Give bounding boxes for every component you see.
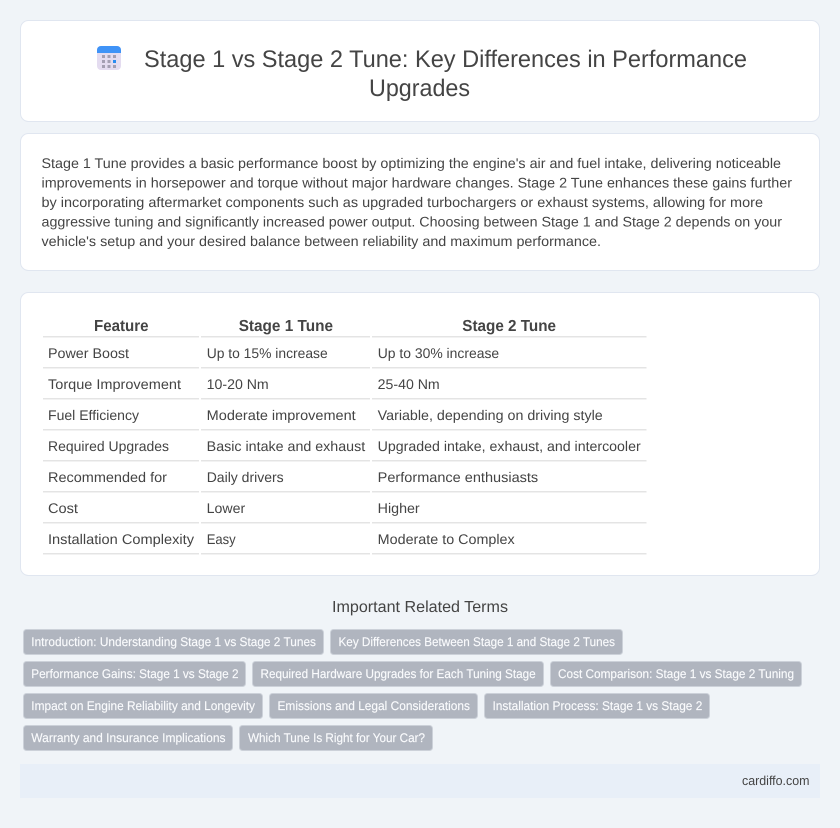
table header row: Stage 1 Tune: [239, 318, 333, 335]
title: Upgrades: [369, 75, 470, 102]
row: recommended for: Daily drivers: [207, 469, 284, 485]
title: [144, 46, 747, 102]
tag: introduction: [24, 630, 324, 654]
footer: cardiffo.com: [742, 773, 810, 788]
tag: required hardware: Required Hardware Upgrades for Each Tuning Stage: [260, 667, 536, 681]
panel: introduction text: aggressive tuning and significantly increased power output. Choosing between Stage 1 and Stage 2 depends on your: [42, 214, 782, 230]
row: cost: [43, 500, 646, 524]
row: fuel efficiency: [43, 407, 646, 430]
row: torque improvement: [43, 376, 646, 400]
panel: introduction text: improvements in horsepower and torque without major hardware changes. Stage 2 Tune enhances these gains further: [42, 174, 792, 190]
tag: key differences: [330, 630, 622, 654]
panel: related term tags: [24, 630, 802, 750]
row: cost: Lower: [207, 500, 246, 516]
panel: header: [20, 20, 820, 122]
tag: cost comparison: Cost Comparison: Stage 1 vs Stage 2 Tuning: [558, 667, 794, 681]
row: installation complexity: [43, 531, 646, 554]
row: recommended for: Performance enthusiasts: [378, 469, 538, 485]
row: recommended for: [43, 469, 646, 492]
row: power boost: Power Boost: [48, 345, 129, 361]
panel: introduction text: [20, 134, 820, 270]
tag: key differences: Key Differences Between Stage 1 and Stage 2 Tunes: [338, 635, 615, 649]
tag: which tune: Which Tune Is Right for Your Car?: [248, 731, 425, 745]
row: required upgrades: Upgraded intake, exhaust, and intercooler: [378, 438, 641, 454]
tag: cost comparison: [550, 662, 802, 686]
heading: important related terms: Important Related Terms: [332, 599, 508, 616]
row: cost: Cost: [48, 500, 78, 516]
table header row: [43, 318, 646, 338]
tag: performance gains: [24, 662, 246, 686]
table header row: Feature: [94, 318, 149, 335]
icon: calendar: [97, 46, 121, 70]
tag: required hardware: [252, 662, 544, 686]
panel: comparison table: [20, 292, 820, 576]
row: power boost: [43, 345, 646, 368]
row: installation complexity: Moderate to Complex: [378, 531, 515, 547]
tag: warranty: Warranty and Insurance Implications: [31, 731, 225, 745]
panel: introduction text: vehicle's setup and your desired balance between reliability and maximum performance.: [42, 233, 601, 249]
row: cost: Higher: [378, 500, 420, 516]
tag: emissions: [270, 694, 478, 718]
panel: introduction text: by incorporating aftermarket components such as upgraded turbochargers or exhaust systems, allowing for more: [42, 194, 763, 210]
table header row: Stage 2 Tune: [462, 318, 556, 335]
tag: installation process: [484, 694, 710, 718]
row: required upgrades: Basic intake and exhaust: [207, 438, 365, 454]
title: Stage 1 vs Stage 2 Tune: Key Differences in Performance: [144, 46, 747, 73]
row: power boost: Up to 15% increase: [207, 345, 328, 361]
tag: warranty: [24, 726, 232, 750]
row: required upgrades: Required Upgrades: [48, 438, 169, 454]
row: installation complexity: Installation Complexity: [48, 531, 194, 547]
row: required upgrades: [43, 438, 646, 462]
row: torque improvement: 10-20 Nm: [207, 376, 269, 392]
tag: engine reliability: Impact on Engine Reliability and Longevity: [31, 699, 256, 713]
row: recommended for: Recommended for: [48, 469, 167, 485]
tag: engine reliability: [24, 694, 262, 718]
row: installation complexity: Easy: [207, 531, 236, 547]
tag: emissions: Emissions and Legal Considerations: [278, 699, 470, 713]
panel: introduction text: Stage 1 Tune provides a basic performance boost by optimizing the engine's air and fuel intake, delivering noticeable: [42, 155, 781, 171]
tag: installation process: Installation Process: Stage 1 vs Stage 2: [492, 699, 702, 713]
row: fuel efficiency: Fuel Efficiency: [48, 407, 139, 423]
row: power boost: Up to 30% increase: [378, 345, 499, 361]
tag: which tune: [240, 726, 432, 750]
row: torque improvement: 25-40 Nm: [378, 376, 440, 392]
footer: [20, 764, 820, 798]
row: torque improvement: Torque Improvement: [48, 376, 181, 392]
row: fuel efficiency: Moderate improvement: [207, 407, 356, 423]
row: fuel efficiency: Variable, depending on driving style: [378, 407, 603, 423]
tag: introduction: Introduction: Understanding Stage 1 vs Stage 2 Tunes: [31, 635, 316, 649]
tag: performance gains: Performance Gains: Stage 1 vs Stage 2: [31, 667, 239, 681]
